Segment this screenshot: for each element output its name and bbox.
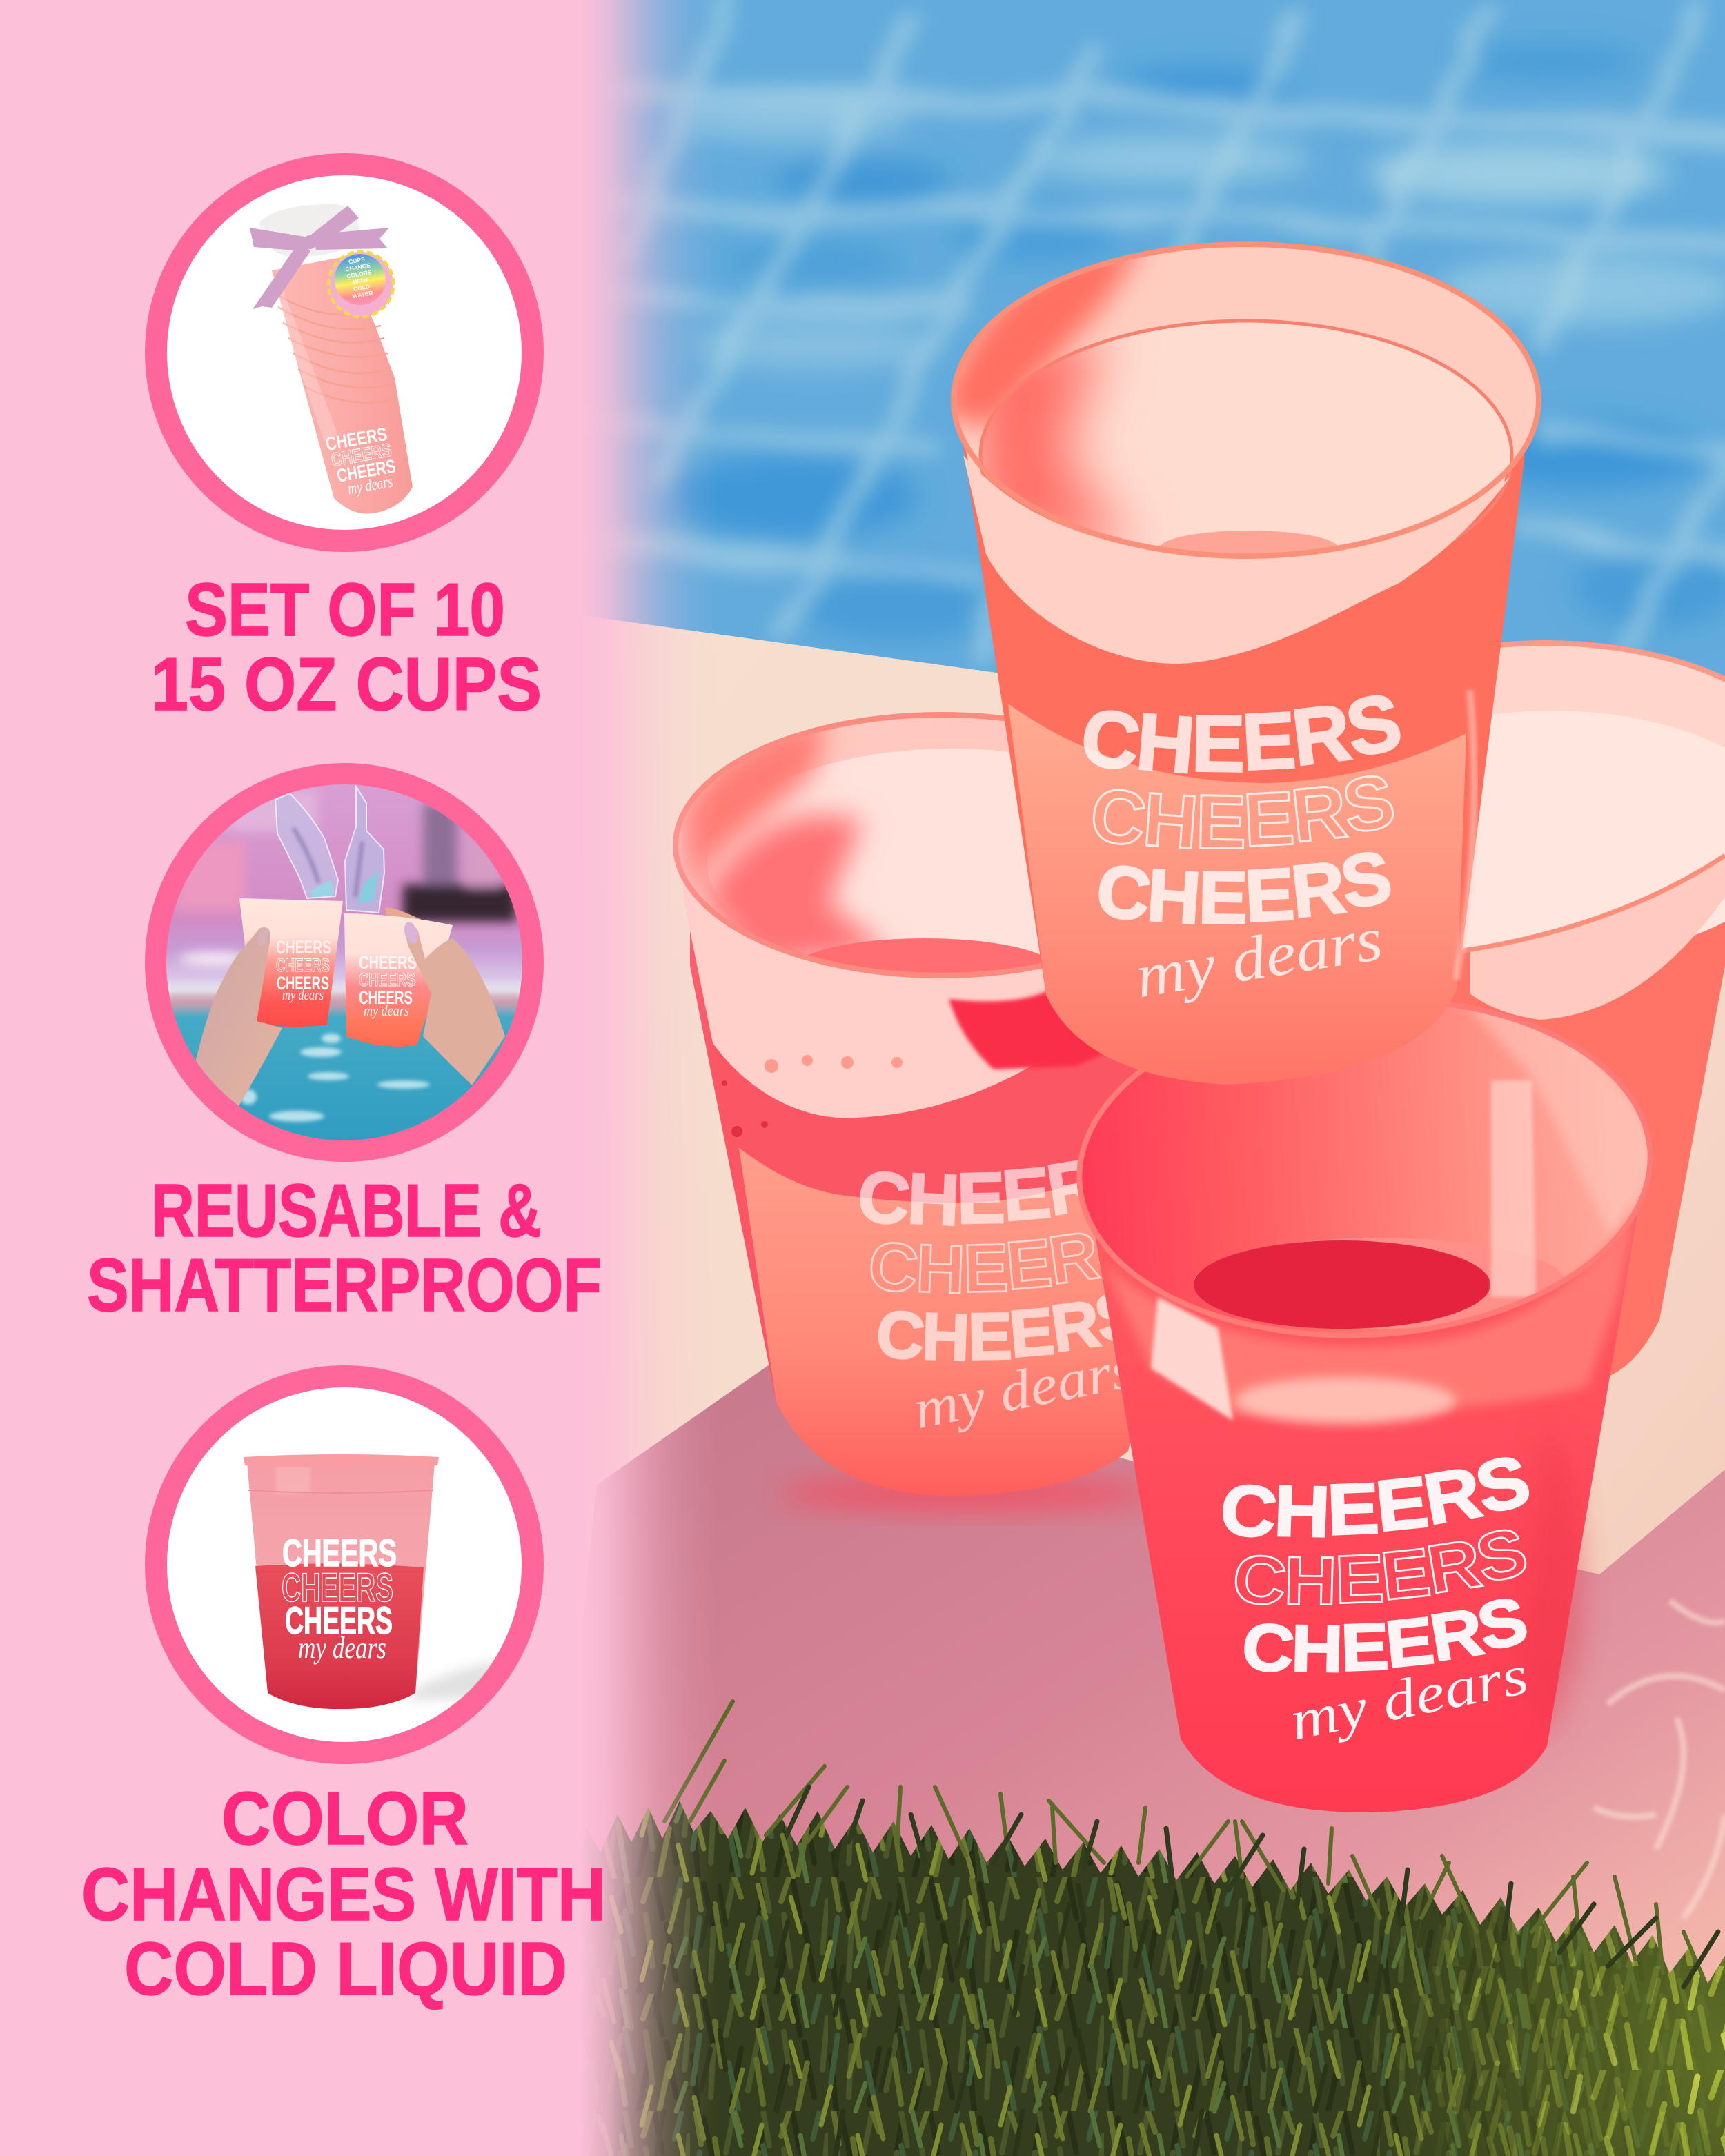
circle badge ring [156,164,533,541]
cup print: cheers my dears: CHEERS [860,1204,1150,1314]
cup print: cheers my dears: CHEERS [285,1599,393,1642]
rainbow hang tag [324,247,398,322]
cup: rear left [673,712,1138,1496]
fingernails [256,927,270,947]
rainbow hang tag: WITH [353,276,368,286]
pool water with tiles [552,0,1725,731]
left cup [239,898,343,1027]
cup print: cheers my dears: CHEERS [1090,834,1398,942]
right cup [344,913,453,1047]
cup print: cheers my dears: CHEERS [1074,675,1408,792]
cup print: cheers my dears: CHEERS [1223,1512,1536,1627]
cup print: cheers my dears: CHEERS [1083,758,1401,868]
cup print: cheers my dears: CHEERS [1210,1438,1539,1560]
cup print: cheers my dears: my dears [298,1631,386,1665]
cup print: cheers my dears: CHEERS [335,455,397,486]
pool deck [552,611,1725,2156]
cup print: cheers my dears: CHEERS [330,439,393,471]
cup print: cheers my dears: my dears [909,1337,1140,1441]
cup print: cheers my dears: my dears [346,473,394,498]
photo: two cups clinking over a pool [159,780,531,1145]
cup print: cheers my dears: CHEERS [869,1275,1148,1381]
cup print: cheers my dears: CHEERS [1233,1582,1536,1694]
cup print: cheers my dears [324,423,400,501]
circle badge ring [156,1376,533,1753]
cup prints: CHEERS [359,987,413,1008]
water droplets on cup [765,1055,903,1073]
background detail [166,790,524,1005]
rainbow hang tag: CUPS [348,256,366,266]
cup prints: CHEERS [276,937,331,958]
cup prints: CHEERS [277,973,329,993]
feature: reusable and shatterproof [87,774,602,1327]
deck shadow [552,1365,1725,2042]
cup print: cheers my dears [1074,675,1412,1012]
heading: 15 oz cups: 15 OZ CUPS [151,642,542,726]
cup print: cheers my dears [849,1131,1164,1444]
heading: reusable &: REUSABLE & [151,1169,542,1253]
product: wrapped cup stack [250,204,413,514]
cup prints: my dears [364,1002,409,1019]
circle badge ring [156,774,533,1151]
finger behind right cup [385,907,423,928]
cup: front [1071,985,1659,1812]
heading: set of 10: SET OF 10 [185,568,505,652]
rainbow hang tag: WATER [352,289,373,299]
photo: cups stacked by the pool [552,0,1725,2156]
cup prints: CHEERS [276,955,330,976]
shadow glow under cups [780,1476,1152,1512]
water splash [275,787,384,913]
lilac bow [250,206,389,309]
cup: top of stack [938,241,1539,1085]
left panel: pink background fading into photo [0,0,718,2156]
heading: changes with: CHANGES WITH [81,1852,606,1937]
cup print: cheers my dears: CHEERS [282,1565,393,1610]
rainbow hang tag: COLD [353,283,371,293]
heading: color: COLOR [221,1777,469,1861]
cup prints: CHEERS [359,952,417,973]
cup prints [276,937,417,1019]
cup prints: CHEERS [359,969,415,990]
cup print: cheers my dears [1210,1438,1553,1757]
rainbow hang tag: CHANGE [345,261,371,273]
artificial grass [573,1701,1725,2156]
heading: cold liquid: COLD LIQUID [124,1927,567,2011]
cup print: cheers my dears: my dears [1131,904,1387,1011]
cup: rear right [1270,643,1725,1380]
heading: shatterproof: SHATTERPROOF [87,1243,602,1327]
feature: color changes with cold liquid [81,1376,606,2011]
feature: set of 10 cups [151,164,542,726]
cup print: cheers my dears: CHEERS [324,424,389,455]
cup print: cheers my dears: CHEERS [282,1531,397,1574]
sunlight caustics on deck [1594,1601,1725,1918]
product: color changing cup [244,1454,504,1709]
cup prints: my dears [282,986,324,1003]
cup print: cheers my dears: my dears [1284,1644,1534,1752]
left hand [196,927,282,1107]
right hand [404,925,505,1085]
tissue wrap [259,204,359,257]
cup print: cheers my dears: CHEERS [849,1131,1154,1247]
rainbow hang tag: COLORS [346,268,372,279]
cup print: cheers my dears [282,1531,397,1665]
